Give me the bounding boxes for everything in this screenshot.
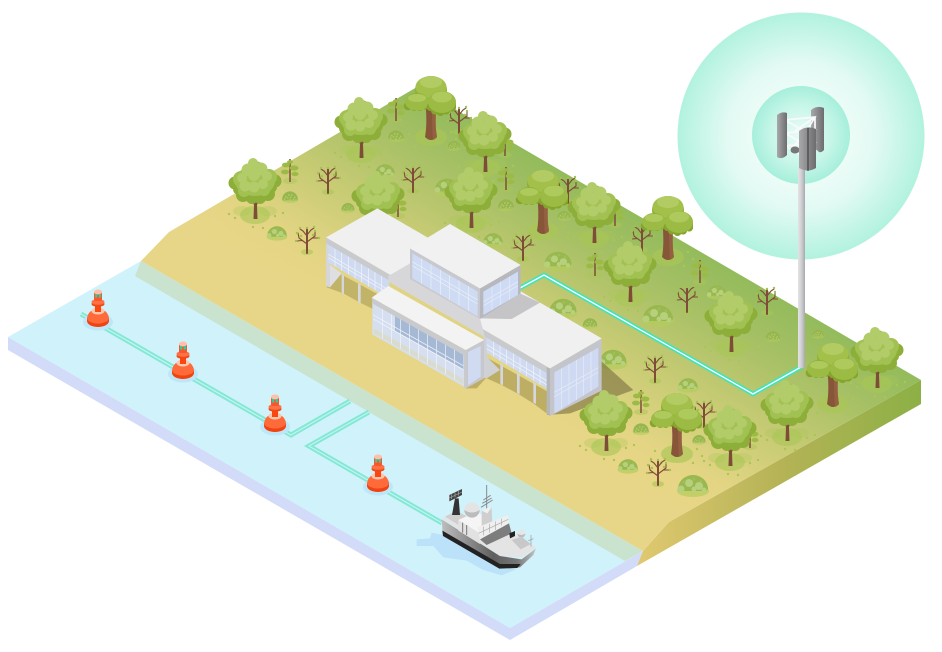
end facade bbox=[547, 338, 602, 416]
bush bbox=[633, 423, 649, 435]
dish bbox=[790, 146, 800, 154]
bush bbox=[375, 164, 395, 179]
left wing end wall bbox=[326, 237, 330, 287]
sapling bbox=[741, 425, 758, 450]
submarine cable: buoys to shore bbox=[81, 314, 350, 435]
ship water shadow bbox=[417, 533, 517, 575]
large tree bbox=[641, 196, 694, 267]
bush bbox=[599, 350, 627, 370]
water side edge bbox=[8, 337, 643, 640]
back antenna panel bbox=[811, 107, 824, 152]
bush bbox=[692, 435, 706, 445]
land side wall bbox=[637, 380, 921, 566]
radar tower bbox=[449, 489, 462, 515]
buoys bbox=[83, 290, 393, 496]
right wing glazing bbox=[487, 337, 548, 389]
bush bbox=[388, 130, 404, 142]
buoy 1 bbox=[83, 290, 113, 330]
bare tree bbox=[692, 400, 717, 429]
large tree bbox=[650, 393, 703, 464]
left wing glazing bbox=[328, 244, 389, 299]
bare tree bbox=[755, 287, 780, 316]
large tree bbox=[404, 76, 457, 147]
leafy tree bbox=[458, 111, 514, 182]
leafy tree bbox=[760, 380, 816, 451]
vegetation behind the building bbox=[228, 76, 824, 370]
leafy tree bbox=[444, 167, 500, 238]
front block bbox=[372, 286, 484, 389]
ground shadows bbox=[327, 268, 633, 415]
bridge lower house bbox=[480, 523, 512, 545]
signal range: inner circle bbox=[752, 86, 850, 184]
leafy tree bbox=[567, 182, 623, 253]
upper block bbox=[410, 224, 521, 319]
sapling bbox=[281, 159, 298, 184]
sapling bbox=[387, 98, 404, 123]
leafy tree bbox=[704, 291, 760, 362]
bush bbox=[678, 378, 698, 393]
leafy tree bbox=[334, 97, 390, 168]
sapling bbox=[632, 390, 650, 415]
research ship bbox=[417, 485, 536, 575]
bare tree bbox=[556, 176, 581, 205]
sapling bbox=[586, 253, 604, 278]
bush bbox=[557, 211, 571, 221]
fibre link: station to tower bbox=[520, 275, 801, 394]
leafy tree bbox=[703, 405, 759, 476]
sapling bbox=[497, 167, 514, 192]
upper block end glazing bbox=[483, 272, 518, 315]
bush bbox=[618, 459, 638, 474]
upper block side glazing bbox=[412, 253, 478, 317]
bare tree bbox=[511, 233, 536, 262]
shaded roof strip bbox=[388, 263, 485, 337]
mast bbox=[481, 485, 493, 531]
shoreline strip bbox=[135, 261, 643, 561]
bow mast bbox=[528, 535, 533, 547]
bush bbox=[812, 330, 824, 339]
small radome bbox=[517, 530, 525, 538]
buoy 3 bbox=[260, 394, 290, 436]
large tree bbox=[516, 170, 569, 241]
front block end bbox=[466, 340, 484, 388]
main roof fascia bbox=[326, 237, 550, 375]
bare tree bbox=[401, 165, 426, 194]
submarine cable: ship to shore bbox=[309, 412, 442, 523]
bush bbox=[765, 331, 781, 342]
water surface bbox=[8, 261, 643, 628]
sapling bbox=[691, 260, 708, 285]
bare tree bbox=[630, 224, 655, 253]
signal range: outer circle bbox=[678, 12, 924, 260]
left wing posts bbox=[342, 274, 344, 294]
bush bbox=[447, 141, 461, 151]
bush bbox=[483, 233, 503, 248]
bow box bbox=[512, 537, 531, 549]
upper block side bbox=[410, 248, 480, 319]
main roof bbox=[326, 208, 602, 368]
tower mast bbox=[798, 168, 805, 368]
station building bbox=[326, 208, 633, 416]
right wing posts bbox=[500, 363, 503, 385]
radome bbox=[464, 502, 480, 518]
leafy tree bbox=[228, 158, 284, 229]
leafy tree bbox=[850, 327, 906, 398]
left antenna panel bbox=[777, 112, 787, 158]
sapling bbox=[496, 133, 514, 158]
black fitting bbox=[509, 531, 515, 538]
hull bbox=[442, 519, 536, 567]
leafy tree bbox=[603, 241, 659, 312]
sapling bbox=[606, 203, 624, 228]
buoy 2 bbox=[168, 342, 198, 382]
right wing inner wall bbox=[483, 333, 500, 378]
tower antennas bbox=[777, 107, 824, 171]
aft deck block bbox=[445, 511, 478, 530]
bush bbox=[677, 475, 709, 497]
leafy tree bbox=[351, 171, 407, 242]
front block glazing bbox=[372, 300, 466, 388]
lattice frame bbox=[785, 117, 815, 158]
bare tree bbox=[675, 285, 700, 314]
bare tree bbox=[295, 226, 320, 255]
main superstructure bbox=[458, 520, 480, 544]
vegetation in front of the building bbox=[579, 327, 906, 497]
upper block roof shadow bbox=[480, 293, 540, 319]
buoy 4 bbox=[363, 454, 393, 496]
front block roof bbox=[372, 286, 484, 350]
bush bbox=[642, 305, 674, 327]
right wing bbox=[483, 333, 548, 404]
upper block roof bbox=[410, 224, 521, 288]
sapling bbox=[389, 194, 406, 219]
bush bbox=[282, 191, 298, 203]
bush bbox=[341, 203, 355, 213]
bridge deck bbox=[477, 515, 509, 539]
bare tree bbox=[316, 166, 341, 195]
bush bbox=[582, 318, 598, 329]
front block fascia bbox=[372, 298, 466, 389]
front antenna panel bbox=[799, 127, 816, 170]
upper block end bbox=[480, 265, 521, 319]
large tree bbox=[806, 343, 859, 414]
bush bbox=[434, 179, 460, 196]
deck bbox=[442, 512, 536, 557]
land surface bbox=[141, 87, 921, 551]
leafy tree bbox=[579, 390, 635, 461]
left wing bbox=[326, 237, 389, 303]
bare tree bbox=[447, 106, 472, 135]
bush bbox=[707, 285, 727, 300]
keel band bbox=[442, 531, 521, 569]
bush bbox=[267, 226, 287, 241]
bush bbox=[544, 252, 572, 272]
bush bbox=[498, 199, 514, 211]
bare tree bbox=[643, 355, 668, 384]
bare tree bbox=[646, 458, 671, 487]
bush bbox=[549, 299, 577, 319]
